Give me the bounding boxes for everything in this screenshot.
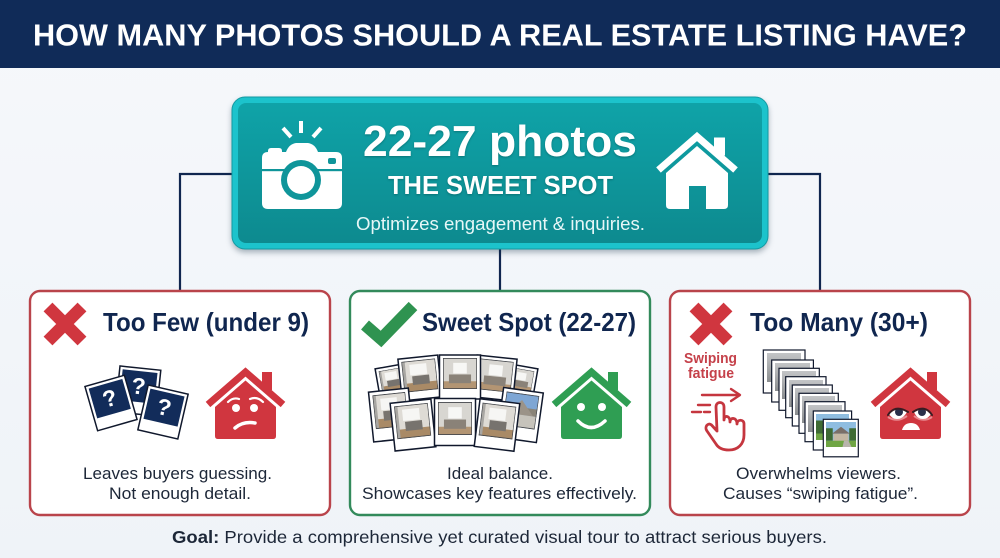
text: sweet spot description: Showcases key features effectively. [362, 484, 637, 503]
text: too few description: Not enough detail. [109, 484, 251, 503]
connector lines [180, 174, 820, 290]
icon: worried red house [208, 372, 283, 439]
panel: hero sweet spot [232, 97, 768, 249]
text: optimizes engagement: Optimizes engagement & inquiries. [356, 213, 645, 234]
icon: photo stack [763, 350, 858, 457]
heading: sweet spot: Sweet Spot (22-27) [422, 307, 636, 337]
icon: swiping hand [692, 389, 744, 450]
heading: too few: Too Few (under 9) [103, 307, 309, 337]
panel: sweet spot [350, 291, 650, 515]
title: HOW MANY PHOTOS SHOULD A REAL ESTATE LISTING HAVE? [33, 18, 967, 52]
icon: red X [48, 307, 82, 341]
panel: too few [30, 291, 330, 515]
icon: happy green house [554, 372, 629, 439]
label: swiping fatigue [684, 351, 737, 382]
label: swiping fatigue: Swiping [684, 351, 737, 367]
icon: house [658, 136, 736, 209]
title banner [0, 0, 1000, 68]
label: swiping fatigue: fatigue [688, 366, 734, 382]
text: too many description: Causes “swiping fatigue”. [723, 484, 918, 503]
icon: green check [365, 306, 413, 339]
text: sweet spot description: Ideal balance. [447, 464, 553, 483]
icon: question mark photos: ? [154, 393, 174, 421]
icon: photo fan [368, 355, 543, 451]
text: goal: Goal: Provide a comprehensive yet curated visual tour to attract serious buyers. [172, 527, 827, 547]
text: too many description: Overwhelms viewers. [736, 464, 901, 483]
panel: too many [670, 291, 970, 515]
text: sweet spot description [362, 464, 637, 503]
icon: question mark photos: ? [99, 384, 120, 413]
text: too many description [723, 464, 918, 503]
heading: 22-27 photos: 22-27 photos [363, 117, 637, 166]
text: too few description [83, 464, 272, 503]
heading: too many: Too Many (30+) [750, 307, 928, 337]
icon: red X [694, 307, 728, 341]
icon: camera [262, 121, 342, 209]
subheading: the sweet spot: THE SWEET SPOT [388, 170, 613, 200]
icon: question mark photos [85, 366, 188, 439]
icon: tired red house [873, 372, 948, 439]
text: too few description: Leaves buyers guessing. [83, 464, 272, 483]
icon: question mark photos: ? [130, 372, 147, 400]
